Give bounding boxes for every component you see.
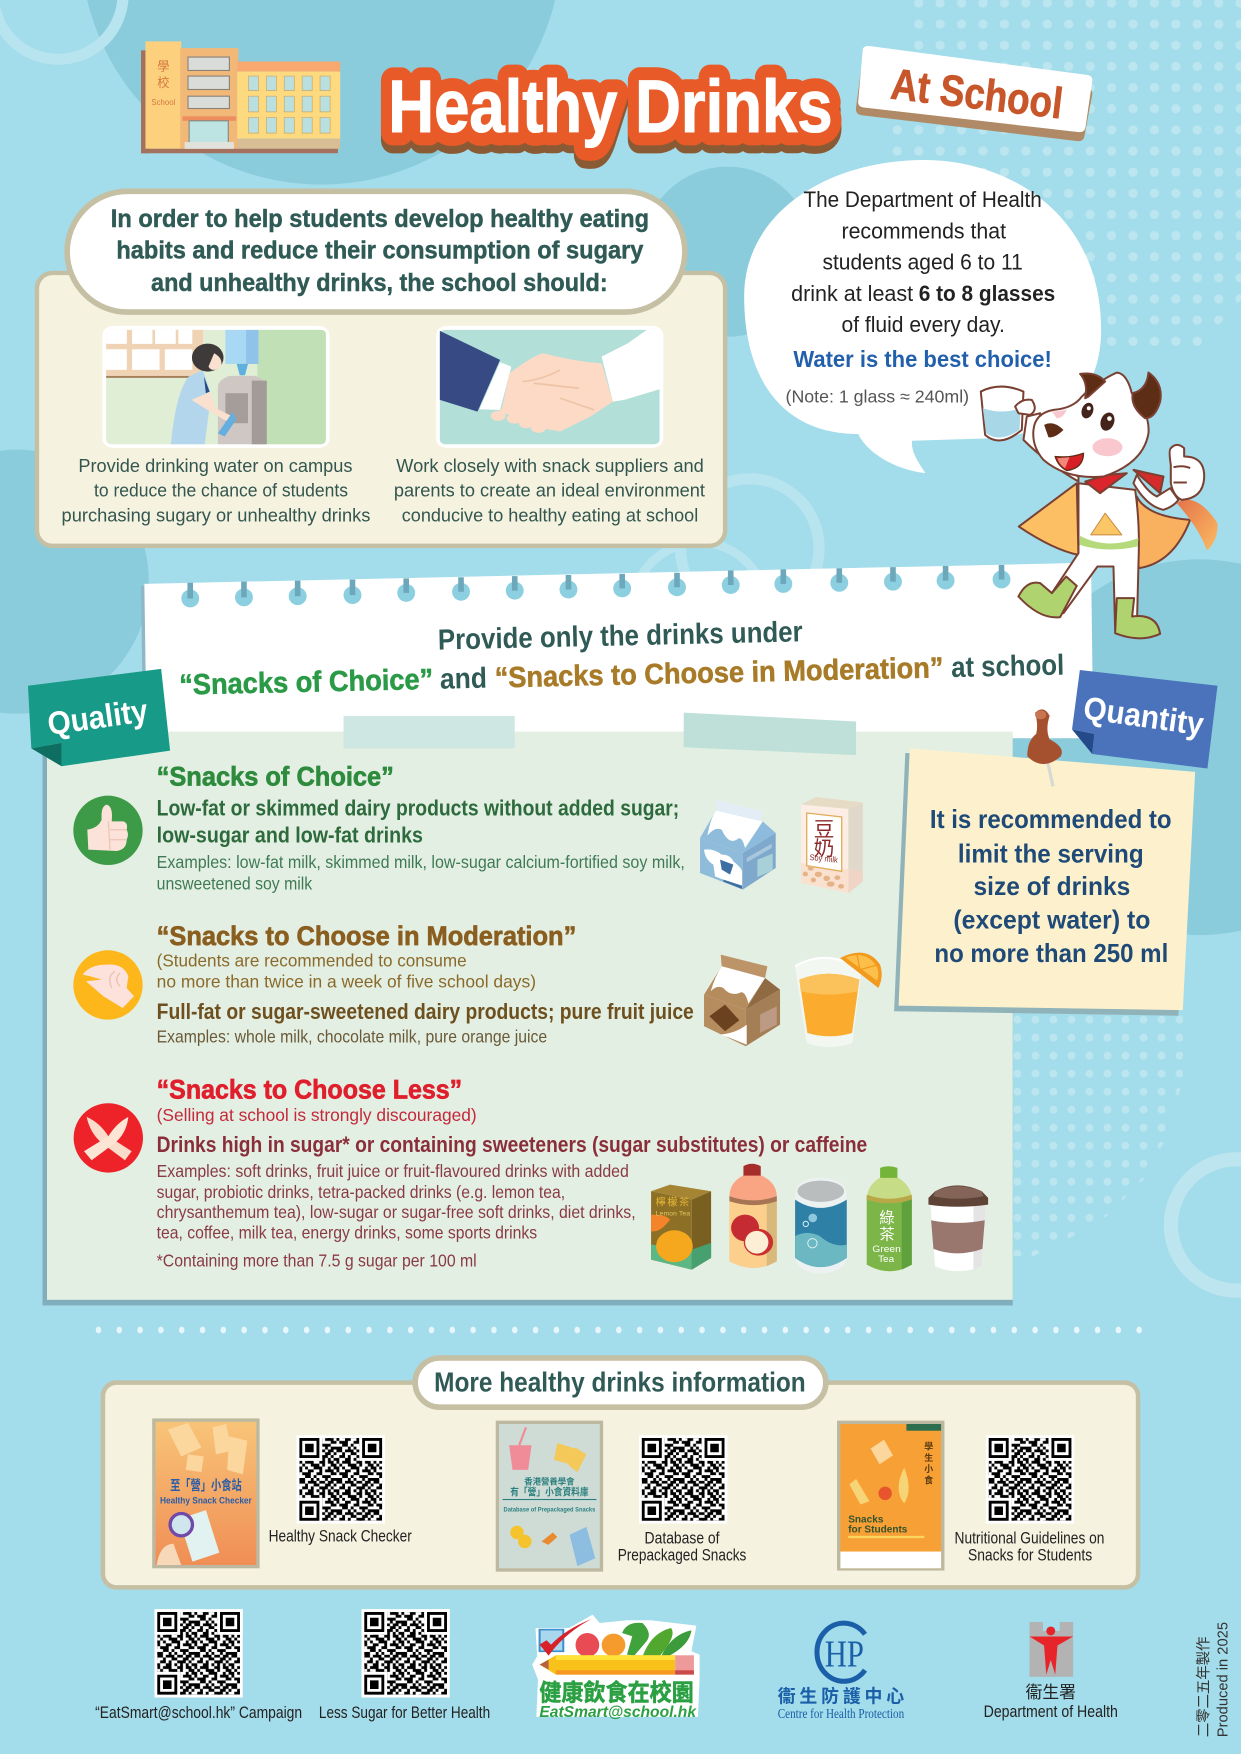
heading: provide only: Provide only the drinks under	[438, 616, 803, 657]
section: snacks to choose in moderation: Examples: whole milk, chocolate milk, pure orange juice	[157, 1027, 547, 1047]
logo: Department of Health: Department of Health	[984, 1703, 1118, 1721]
logo: Centre for Health Protection: HP	[825, 1634, 864, 1676]
database cover: 香港營養學會	[524, 1476, 575, 1486]
icon: lemon tea: 檸檬茶	[656, 1196, 689, 1209]
resource: database of prepackaged snacks	[496, 1421, 746, 1572]
section: snacks of choice: unsweetened soy milk	[157, 873, 313, 893]
section: snacks to choose less: Drinks high in sugar* or containing sweeteners (sugar substitutes) or caffeine	[157, 1132, 867, 1157]
production note: Produced in 2025	[1215, 1622, 1232, 1737]
icon: orange juice	[795, 953, 882, 1047]
footer QR: less sugar	[319, 1609, 490, 1722]
icon: milk carton	[700, 800, 776, 890]
caption: drinking water: to reduce the chance of students	[94, 480, 348, 501]
section: snacks to choose less: Examples: soft drinks, fruit juice or fruit-flavoured drinks with added	[157, 1161, 629, 1181]
caption: drinking water: purchasing sugary or unhealthy drinks	[62, 504, 370, 525]
logo: EatSmart@school.hk	[532, 1615, 700, 1721]
section: snacks of choice	[73, 761, 863, 893]
resource: nutritional guidelines: Nutritional Guidelines on	[955, 1530, 1104, 1548]
database cover: 有「營」小食資料庫	[510, 1486, 589, 1499]
tab: Quality: Quality	[45, 692, 150, 742]
icon: lemon tea	[651, 1185, 711, 1270]
section: snacks of choice: Low-fat or skimmed dairy products without added sugar;	[157, 795, 679, 820]
speech bubble: Water is the best choice!	[793, 346, 1052, 372]
logo: Centre for Health Protection: Centre for Health Protection	[778, 1706, 904, 1721]
speech bubble	[744, 160, 1101, 473]
dotted divider	[96, 1327, 1142, 1333]
resource: healthy snack checker	[152, 1418, 412, 1568]
guidelines cover	[837, 1421, 944, 1571]
caption: suppliers: conducive to healthy eating at school	[402, 504, 698, 525]
icon: soy milk box: Soy milk	[809, 852, 839, 865]
heading pill: More healthy drinks information	[434, 1367, 806, 1398]
panel: school should	[37, 191, 725, 546]
resource: database of prepackaged snacks: Database of	[645, 1530, 720, 1548]
notebook paper	[141, 563, 1093, 738]
caption: drinking water	[62, 455, 370, 525]
logo: Centre for Health Protection: 衞生防護中心	[778, 1686, 904, 1707]
heading: provide only: and	[440, 663, 487, 696]
icon: school building: School	[151, 98, 176, 107]
speech bubble: drink at least	[791, 281, 914, 306]
heading: provide only: at school	[951, 650, 1065, 684]
icon: school building: 學	[157, 59, 170, 73]
database cover: Database of Prepackaged Snacks	[504, 1506, 596, 1513]
mascot: dog holding water	[981, 373, 1218, 638]
icon: lemon tea: Lemon Tea	[656, 1211, 690, 1218]
logo: Department of Health	[984, 1622, 1118, 1721]
footer QR: EatSmart campaign: “EatSmart@school.hk” Campaign	[95, 1704, 302, 1722]
footer QR: EatSmart campaign	[95, 1609, 302, 1722]
guidelines cover: for Students	[848, 1525, 908, 1536]
logo: Department of Health: 衞生署	[1026, 1683, 1076, 1702]
section: snacks to choose less: “Snacks to Choose Less”	[157, 1074, 462, 1104]
heading: provide only	[178, 610, 1065, 702]
illustration: student at water dispenser	[102, 326, 330, 448]
section: snacks to choose less	[74, 1074, 988, 1274]
caption: drinking water: Provide drinking water on campus	[78, 455, 352, 476]
speech bubble: recommends that	[842, 218, 1007, 243]
logo: Centre for Health Protection	[778, 1623, 904, 1721]
tab: Quantity	[1072, 670, 1218, 768]
section: snacks to choose less: (Selling at school is strongly discouraged)	[157, 1105, 477, 1125]
heading pill: and unhealthy drinks, the school should:	[151, 270, 608, 297]
footer QR: less sugar: Less Sugar for Better Health	[319, 1704, 490, 1722]
icon: green tea bottle: 綠	[879, 1210, 895, 1227]
booklet cover	[152, 1418, 260, 1568]
tab: Quality	[28, 669, 170, 766]
panel: quality	[43, 713, 1013, 1305]
title: Healthy Drinks: Healthy Drinks	[388, 65, 833, 148]
resource: nutritional guidelines	[837, 1421, 1104, 1571]
icon: small amount hand	[73, 950, 143, 1020]
booklet cover: Healthy Snack Checker	[160, 1495, 252, 1505]
icon: soy milk box	[801, 797, 863, 893]
tab: Quantity: Quantity	[1081, 690, 1206, 742]
panel: quantity sticky note: limit the serving	[958, 840, 1144, 868]
caption: suppliers	[394, 455, 705, 525]
illustration: handshake	[436, 326, 663, 448]
panel: quantity sticky note: size of drinks	[974, 873, 1130, 901]
booklet cover: 至「營」小食站	[170, 1477, 242, 1493]
section: snacks to choose in moderation: no more than twice in a week of five school days)	[157, 972, 536, 992]
label: At School: At School	[888, 61, 1065, 128]
label: At School	[856, 46, 1092, 141]
logo: EatSmart@school.hk: 健康飲食在校園	[539, 1678, 694, 1705]
icon: thumbs up	[73, 796, 143, 865]
production note	[1196, 1622, 1232, 1737]
icon: coffee cup	[928, 1185, 988, 1271]
icon: school building: 校	[157, 75, 170, 90]
section: snacks to choose in moderation	[73, 921, 882, 1047]
guidelines cover: 食	[924, 1474, 933, 1485]
icon: push pin	[1027, 709, 1062, 786]
speech bubble: students aged 6 to 11	[822, 250, 1023, 275]
title: Healthy Drinks: Healthy Drinks	[388, 65, 833, 148]
heading pill	[67, 191, 685, 312]
heading pill	[415, 1358, 826, 1407]
panel: quantity sticky note: no more than 250 ml	[934, 940, 1168, 968]
panel: more healthy drinks information	[103, 1358, 1138, 1587]
speech bubble: of fluid every day.	[842, 312, 1005, 337]
section: snacks to choose in moderation: “Snacks to Choose in Moderation”	[157, 921, 576, 951]
icon: green tea bottle: Green	[872, 1244, 901, 1254]
caption: suppliers: parents to create an ideal environment	[394, 480, 705, 501]
icon: chocolate milk carton	[704, 955, 780, 1046]
icon: green tea bottle: 茶	[879, 1227, 895, 1244]
section: snacks to choose in moderation: Full-fat or sugar-sweetened dairy products; pure fruit juice	[157, 999, 694, 1024]
panel: quantity sticky note	[894, 709, 1195, 1016]
heading: provide only: “Snacks to Choose in Moderation”	[494, 652, 944, 694]
section: snacks to choose less: tea, coffee, milk tea, energy drinks, some sports drinks	[157, 1222, 537, 1242]
guidelines cover: 學	[924, 1441, 933, 1452]
section: snacks of choice: Examples: low-fat milk, skimmed milk, low-sugar calcium-fortified soy milk,	[157, 852, 685, 872]
section: snacks to choose in moderation: (Students are recommended to consume	[157, 950, 467, 970]
heading pill: habits and reduce their consumption of sugary	[116, 237, 644, 264]
speech bubble: 6 to 8 glasses	[919, 281, 1055, 306]
panel: quantity sticky note: It is recommended to	[930, 806, 1172, 834]
icon: green tea bottle	[867, 1166, 912, 1271]
section: snacks to choose less: *Containing more than 7.5 g sugar per 100 ml	[157, 1250, 477, 1270]
guidelines cover: 生	[924, 1452, 933, 1463]
section: snacks to choose less: sugar, probiotic drinks, tetra-packed drinks (e.g. lemon tea,	[157, 1182, 565, 1202]
icon: soy milk box: 奶	[814, 838, 834, 861]
guidelines cover: Snacks	[848, 1514, 884, 1525]
section: snacks to choose less: chrysanthemum tea), low-sugar or sugar-free soft drinks, diet drinks,	[157, 1202, 636, 1222]
caption: suppliers: Work closely with snack suppliers and	[396, 455, 704, 476]
icon: crossed arms	[74, 1103, 143, 1173]
speech bubble: The Department of Health	[803, 187, 1042, 212]
heading: provide only: “Snacks of Choice”	[179, 664, 434, 702]
resource: healthy snack checker: Healthy Snack Checker	[269, 1527, 412, 1545]
icon: school building	[141, 41, 340, 153]
section: snacks of choice: low-sugar and low-fat drinks	[157, 822, 423, 847]
production note: 二零二五年製作	[1196, 1637, 1213, 1737]
database cover	[496, 1421, 603, 1572]
heading pill: In order to help students develop healthy eating	[111, 206, 649, 233]
background shapes	[0, 0, 1241, 1298]
title: Healthy Drinks: Healthy Drinks	[388, 73, 833, 156]
panel: quantity sticky note: (except water) to	[953, 906, 1150, 934]
resource: nutritional guidelines: Snacks for Students	[968, 1546, 1092, 1564]
guidelines cover: 小	[924, 1463, 933, 1474]
speech bubble: (Note: 1 glass ≈ 240ml)	[786, 387, 969, 407]
icon: green tea bottle: Tea	[878, 1254, 895, 1264]
icon: soda can	[795, 1178, 847, 1274]
icon: apple juice bottle	[729, 1164, 777, 1268]
section: snacks of choice: “Snacks of Choice”	[157, 761, 394, 791]
icon: soy milk box: 豆	[814, 818, 834, 841]
resource: database of prepackaged snacks: Prepackaged Snacks	[618, 1546, 746, 1564]
logo: EatSmart@school.hk: EatSmart@school.hk	[539, 1704, 697, 1721]
